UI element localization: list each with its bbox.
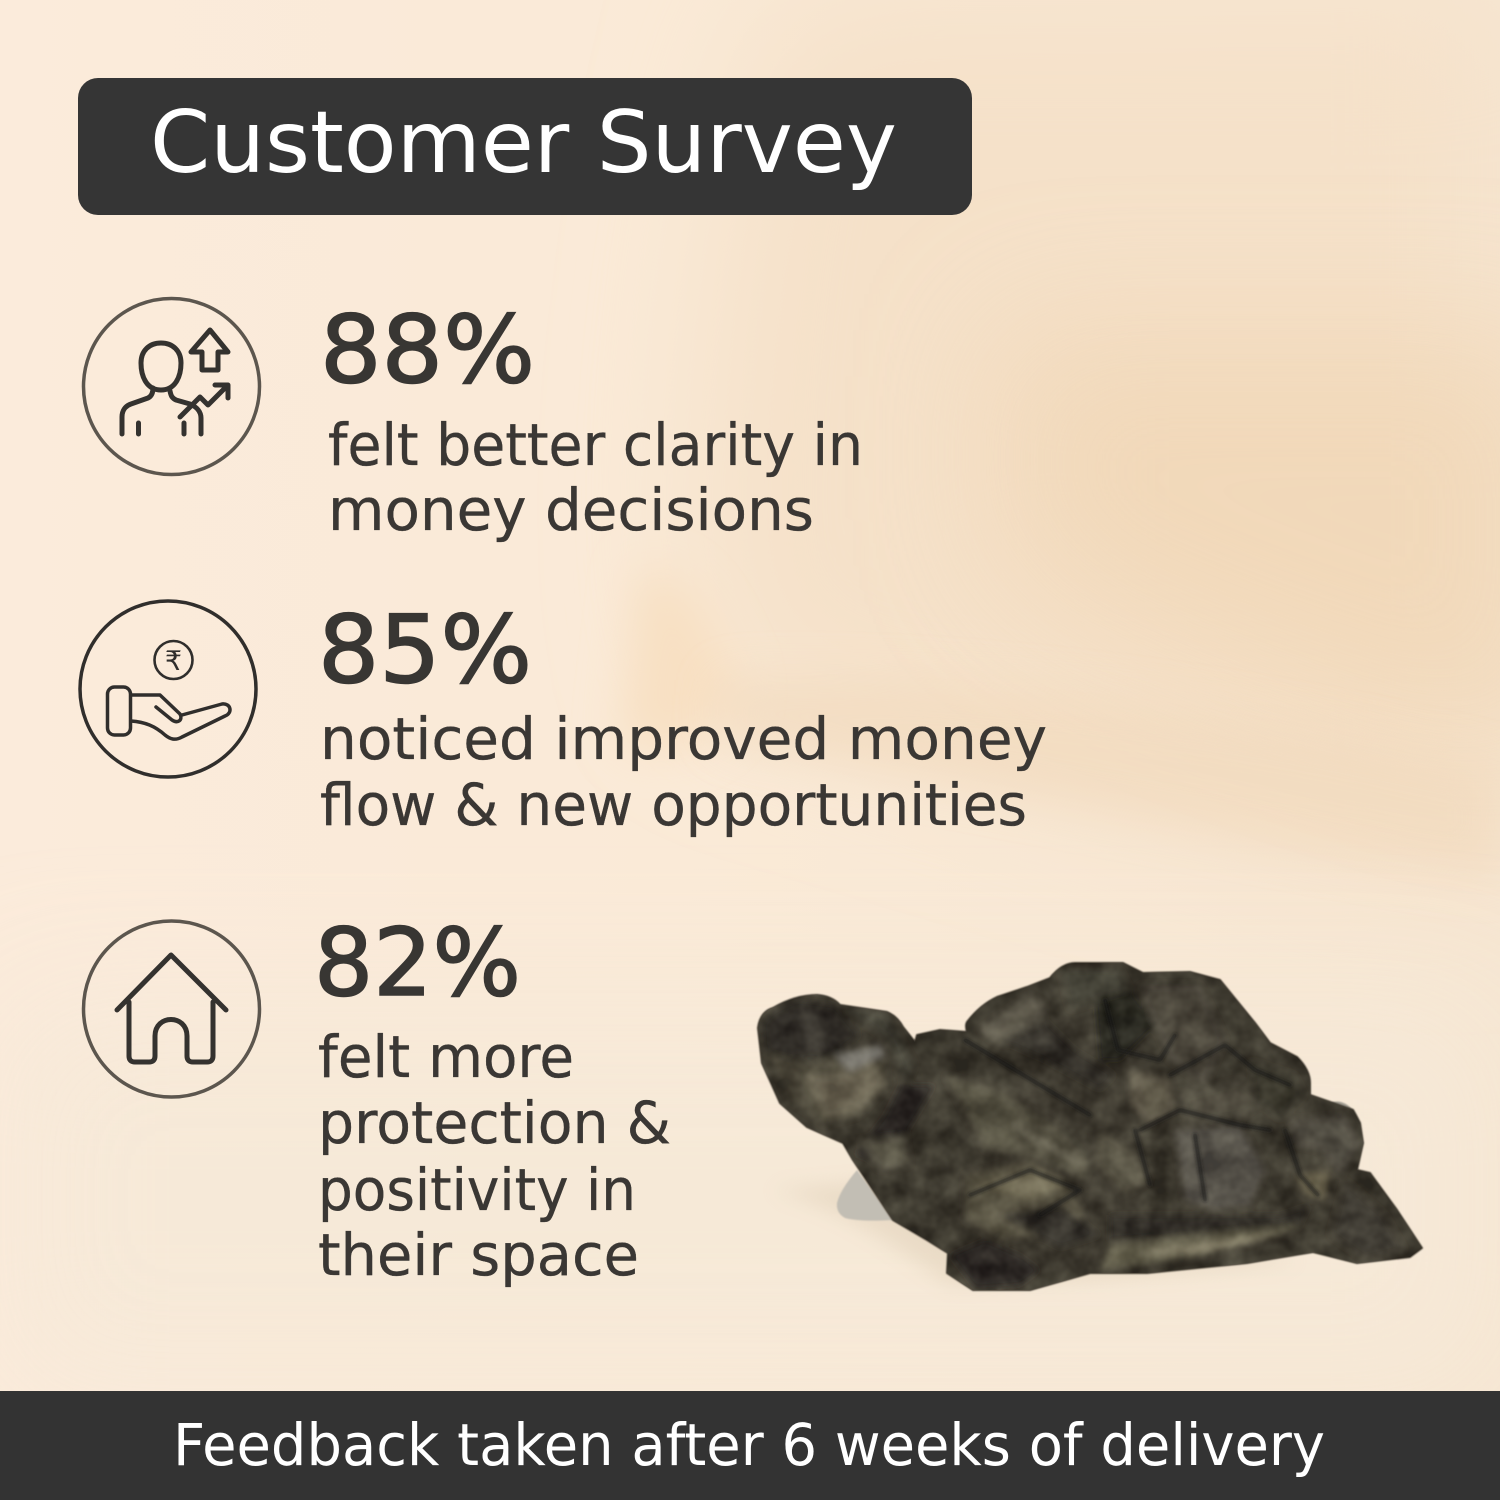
footer bar: Feedback taken after 6 weeks of delivery: [173, 1411, 1325, 1479]
stat: 85%: noticed improved money: [320, 705, 1047, 773]
stat: 85%: flow & new opportunities: [320, 771, 1027, 839]
stat: 88%: money decisions: [328, 476, 814, 544]
stat: 82%: [314, 909, 671, 1289]
title badge: [78, 78, 972, 215]
icon: hand holding rupee coin: [80, 601, 256, 777]
stat: 85%: [318, 596, 1047, 839]
footer bar: [0, 1391, 1500, 1500]
title badge: Customer Survey: [150, 93, 897, 193]
turtle figurine: [750, 955, 1430, 1295]
stat: 88%: felt better clarity in: [328, 411, 863, 479]
stat: 88%: 88%: [320, 296, 535, 405]
stat: 82%: positivity in: [318, 1156, 636, 1224]
stat: 85%: 85%: [318, 596, 532, 705]
icon: person with rising arrows: [84, 298, 260, 474]
stat: 82%: their space: [318, 1221, 639, 1289]
icon: house: [84, 921, 260, 1097]
stat: 82%: felt more: [318, 1023, 574, 1091]
stat: 88%: [320, 296, 863, 544]
stat: 82%: 82%: [314, 909, 521, 1018]
stat: 82%: protection &: [318, 1089, 671, 1157]
icon: hand holding rupee coin: ₹: [165, 646, 182, 677]
